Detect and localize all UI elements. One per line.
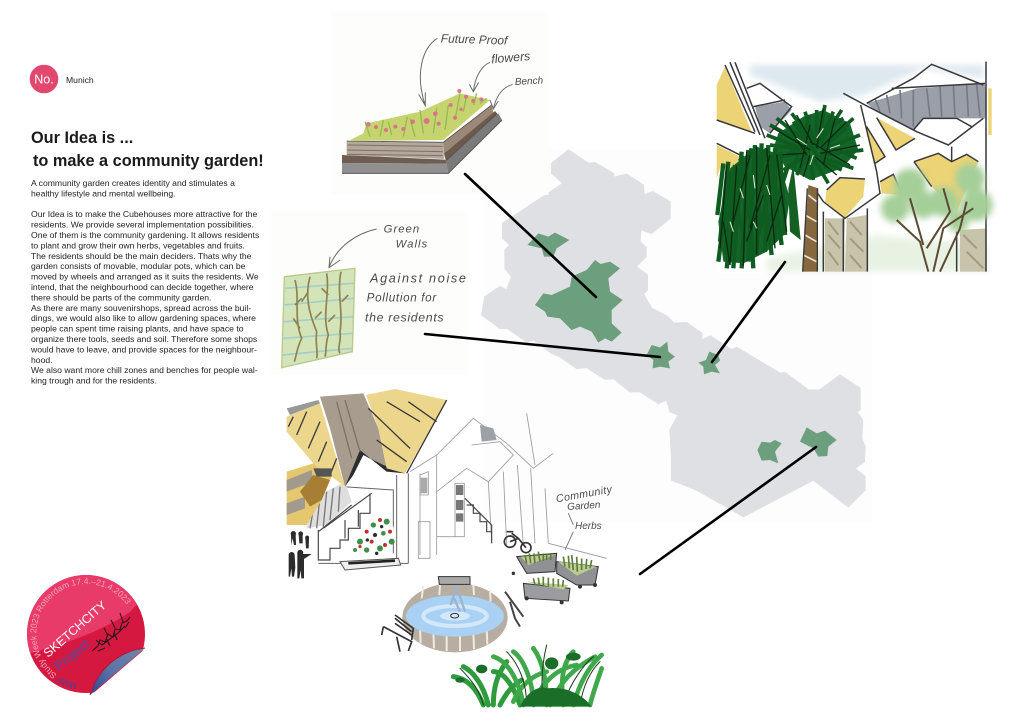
badge: No.: No. <box>34 72 54 86</box>
sketch: raised garden bed: flowers <box>491 49 531 66</box>
sketch: green wall: the residents <box>365 311 444 325</box>
striped wall <box>307 482 352 528</box>
body text: to plant and grow their own herbs, vegetables and fruits. <box>31 240 245 250</box>
bicycle <box>504 532 531 553</box>
green area: east star <box>698 352 720 374</box>
wall outlines <box>410 413 607 558</box>
grey hatched faces <box>755 83 987 133</box>
body text: organize there tools, seeds and soil. Therefore some shops <box>31 334 257 344</box>
sketch: green wall: Walls <box>396 239 428 251</box>
annotation arrows <box>419 38 513 109</box>
handwritten labels: Community <box>555 484 614 505</box>
sticker: Sketchcity: MMP Study Week 2023 Rotterdam 17.4.–21.4.2023 <box>30 578 130 689</box>
yellow cube faces <box>717 67 992 218</box>
body text: We also want more chill zones and benches for people wal- <box>31 365 258 375</box>
sketch: green wall <box>271 212 468 375</box>
sticker: Sketchcity: Project <box>51 636 93 673</box>
sketch: courtyard with community garden: Herbs <box>575 521 602 532</box>
wall panel <box>282 268 355 368</box>
panel: faint map background <box>482 150 872 522</box>
body text: healthy lifestyle and mental wellbeing. <box>31 188 176 198</box>
body text: dings, we would also like to allow gardening spaces, where <box>31 313 256 323</box>
body text: As there are many souvenirshops, spread across the buil- <box>31 303 251 313</box>
flowers <box>366 89 483 132</box>
icon: skyline sketch <box>92 613 130 651</box>
body text: A community garden creates identity and stimulates a <box>31 178 235 188</box>
green area: south-east left <box>757 440 782 463</box>
grass <box>348 93 490 141</box>
body text: moved by wheels and arranged as it suits the residents. We <box>31 272 259 282</box>
map: Cube houses plan <box>482 150 865 517</box>
annotation arrow <box>329 229 377 268</box>
people <box>289 531 312 578</box>
green area: west star <box>647 342 675 368</box>
sticker: Sketchcity: SKETCHCITY <box>41 598 109 660</box>
bed sides <box>443 105 493 153</box>
flower bed <box>340 558 401 570</box>
bench: top <box>438 577 470 584</box>
body text: people can spent time raising plants, and have space to <box>31 324 244 334</box>
roof: lower left <box>287 463 332 525</box>
body text: intend, that the neighbourhood can decide together, where <box>31 282 254 292</box>
body text <box>30 178 259 386</box>
roof: yellow right <box>366 389 447 473</box>
green area: south-east right <box>800 427 837 457</box>
bush <box>353 520 394 558</box>
peeled corner <box>90 648 160 712</box>
arrow: palms to east star <box>712 262 785 362</box>
green area: north garden <box>527 233 569 257</box>
brown walls <box>825 215 987 272</box>
body text: king trough and for the residents. <box>31 376 157 386</box>
sketch: courtyard with community garden <box>287 389 614 707</box>
title: Our Idea is ... <box>31 129 133 147</box>
badge: No. <box>30 65 58 93</box>
bench: left <box>382 615 413 652</box>
right stairs <box>465 498 492 543</box>
location label: Munich <box>66 75 94 85</box>
body text: garden consists of movable, modular pots, which can be <box>31 261 246 271</box>
body text: Our Idea is to make the Cubehouses more attractive for the <box>31 209 258 219</box>
body text: The residents should be the main deciders. Thats why the <box>31 251 252 261</box>
arrow: bed to central garden <box>465 174 596 297</box>
planters <box>517 553 557 573</box>
sketch: raised garden bed <box>330 12 548 195</box>
arrow: green wall to west star <box>425 334 660 357</box>
fountain <box>382 577 523 652</box>
arrow: courtyard to south-east garden <box>640 447 816 574</box>
foreground plants <box>453 645 602 705</box>
sketch: palm trees and cube houses <box>717 62 993 273</box>
body text: would have to leave, and provide spaces for the neighbour- <box>30 344 257 354</box>
green area: central garden <box>535 260 623 343</box>
tree on right <box>881 163 993 232</box>
title <box>31 129 264 170</box>
body text: there should be parts of the community garden. <box>31 292 211 302</box>
handwritten labels: Future Proof <box>441 31 509 48</box>
dark window details <box>421 478 427 493</box>
left stairs <box>318 493 372 560</box>
body text: residents. We provide several implementation possibilities. <box>31 220 254 230</box>
building footprint <box>482 150 865 517</box>
sketch: green wall: Against noise <box>369 271 468 285</box>
sketch: raised garden bed: Bench <box>515 76 544 88</box>
sketch: courtyard with community garden: Garden <box>567 500 601 513</box>
bench: right <box>505 592 523 627</box>
palm crown left <box>718 147 790 263</box>
body text: One of them is the community gardening. It allows residents <box>31 230 259 240</box>
roof: grey <box>320 393 387 487</box>
pointer lines <box>425 174 816 574</box>
black house lines <box>717 62 986 272</box>
main corner lines <box>318 473 408 563</box>
palm trunk <box>803 185 818 272</box>
sketch: green wall: Pollution for <box>367 292 437 305</box>
roof: yellow left <box>287 403 345 487</box>
handwritten labels: Green <box>384 223 420 235</box>
body text: hood. <box>31 355 53 365</box>
palm crown right <box>773 110 858 180</box>
sky and ground <box>717 62 988 273</box>
title: to make a community garden! <box>33 152 264 170</box>
